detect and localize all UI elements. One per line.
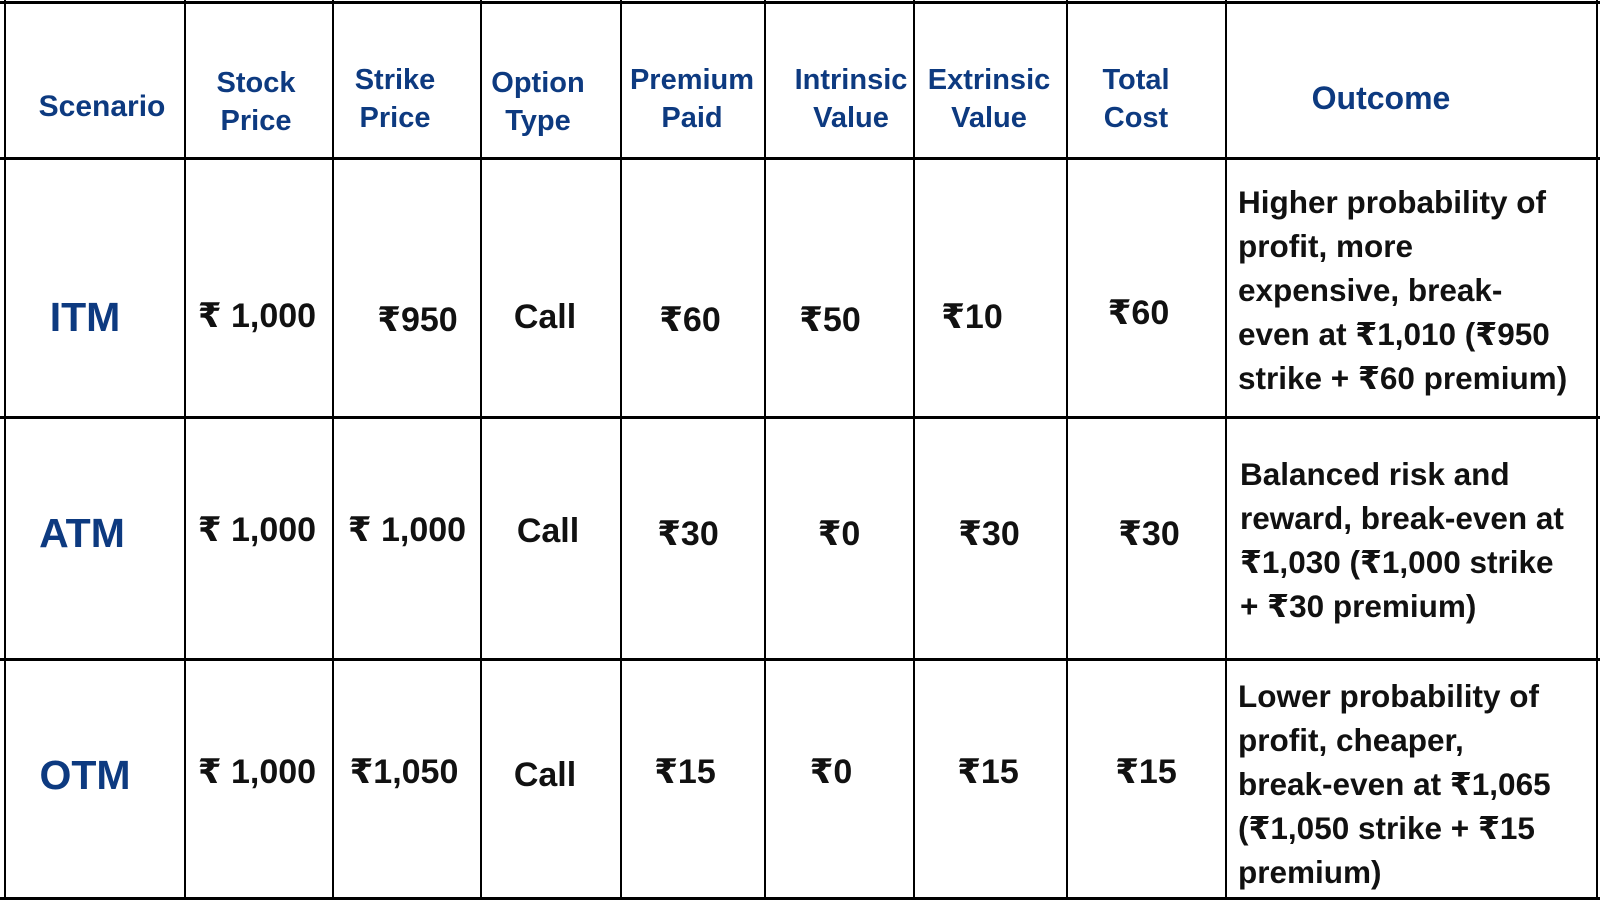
- row: ITM: ₹ 1,000: [198, 297, 316, 335]
- row: OTM: premium): [1238, 854, 1382, 890]
- row: OTM: ₹15: [654, 753, 716, 791]
- row: OTM: OTM: [39, 752, 131, 798]
- row: ITM: ₹10: [941, 298, 1003, 336]
- header row: Premium: [630, 64, 754, 96]
- row: ATM: ₹ 1,000: [198, 511, 316, 549]
- row: ITM: ITM: [50, 294, 120, 340]
- row: ATM: + ₹30 premium): [1240, 588, 1476, 624]
- row: ATM: reward, break-even at: [1240, 500, 1564, 536]
- row: ATM: Call: [517, 512, 579, 550]
- header row: Total: [1102, 64, 1170, 96]
- row: ATM: ₹0: [818, 515, 860, 553]
- row: OTM: ₹0: [810, 753, 852, 791]
- row: ITM: expensive, break-: [1238, 272, 1502, 308]
- row: OTM: [39, 678, 1551, 890]
- header row: Scenario: [39, 90, 165, 123]
- row: OTM: ₹15: [1115, 753, 1177, 791]
- header row: Price: [221, 105, 291, 137]
- row: ITM: profit, more: [1238, 228, 1413, 264]
- row: ATM: ₹ 1,000: [348, 511, 466, 549]
- row: ATM: ₹1,030 (₹1,000 strike: [1240, 544, 1554, 580]
- row: ATM: ATM: [39, 510, 125, 556]
- row: OTM: Call: [514, 756, 576, 794]
- row: ATM: ₹30: [657, 515, 719, 553]
- header row: Paid: [661, 102, 723, 134]
- row: ATM: Balanced risk and: [1240, 456, 1510, 492]
- row: ITM: even at ₹1,010 (₹950: [1238, 316, 1550, 352]
- header row: Value: [813, 102, 889, 134]
- header row: Cost: [1104, 102, 1168, 134]
- row: OTM: ₹ 1,000: [198, 753, 316, 791]
- row: ITM: ₹50: [799, 301, 861, 339]
- row: ITM: ₹60: [659, 301, 721, 339]
- row: OTM: ₹1,050: [350, 753, 458, 791]
- row: ITM: ₹60: [1108, 294, 1169, 332]
- row: ATM: [39, 456, 1564, 624]
- header row: Stock: [216, 67, 295, 99]
- header row: Value: [951, 102, 1027, 134]
- row: OTM: Lower probability of: [1238, 678, 1539, 714]
- header row: Type: [505, 105, 571, 137]
- header row: [39, 64, 1450, 137]
- header row: Outcome: [1312, 80, 1450, 116]
- row: OTM: profit, cheaper,: [1238, 722, 1464, 758]
- header row: Intrinsic: [795, 64, 907, 96]
- header row: Price: [360, 102, 430, 134]
- row: OTM: ₹15: [957, 753, 1019, 791]
- row: OTM: break-even at ₹1,065: [1238, 766, 1551, 802]
- row: ITM: strike + ₹60 premium): [1238, 360, 1567, 396]
- header row: Extrinsic: [928, 64, 1050, 96]
- row: ATM: ₹30: [1118, 515, 1180, 553]
- header row: Option: [491, 67, 585, 99]
- row: ITM: ₹950: [377, 301, 458, 339]
- row: ITM: Call: [514, 298, 576, 336]
- row: ATM: ₹30: [958, 515, 1020, 553]
- row: OTM: (₹1,050 strike + ₹15: [1238, 810, 1535, 846]
- header row: Strike: [355, 64, 435, 96]
- row: ITM: [50, 184, 1567, 396]
- row: ITM: Higher probability of: [1238, 184, 1546, 220]
